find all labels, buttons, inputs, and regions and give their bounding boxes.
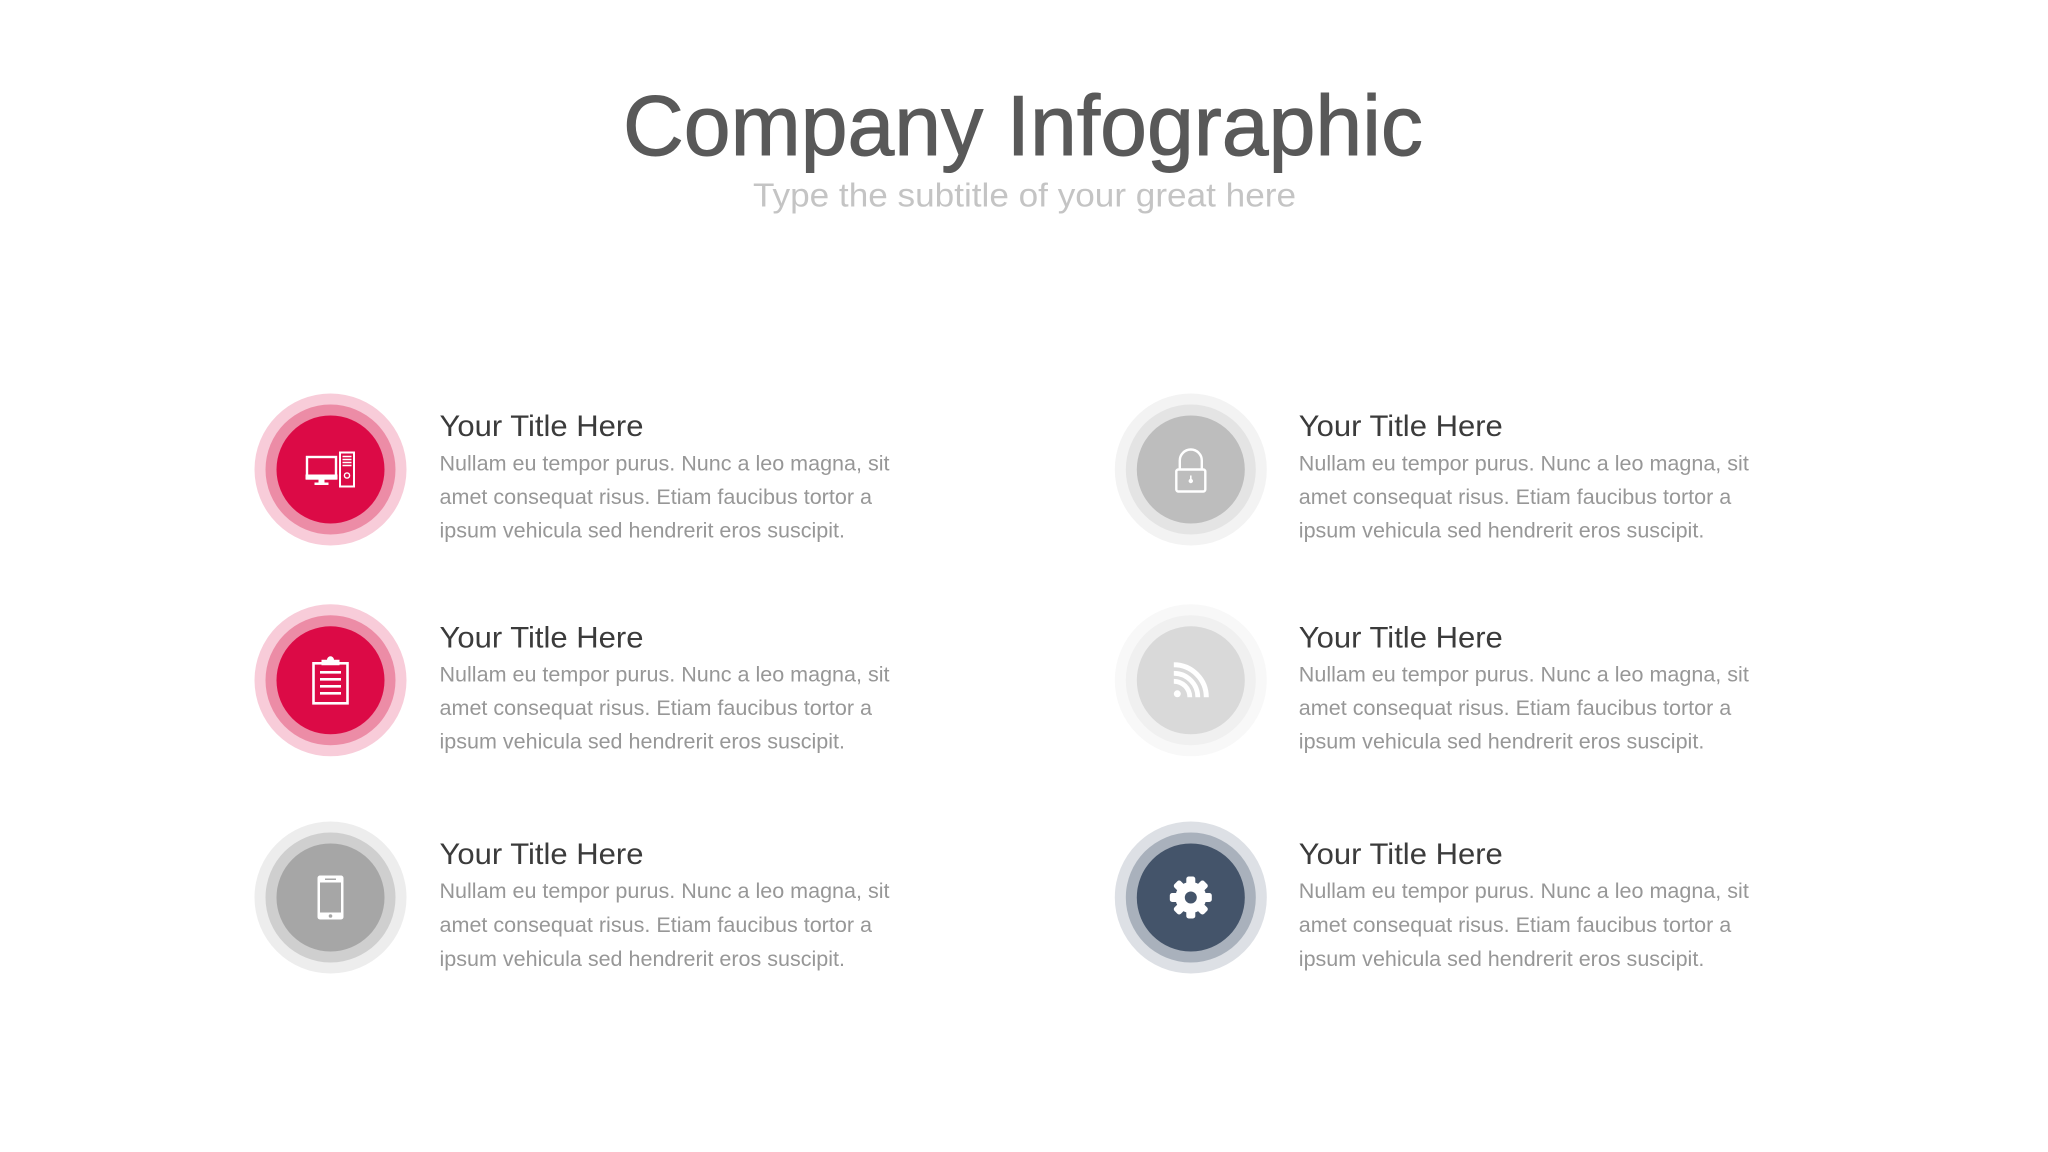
- icon: rss: [1115, 604, 1267, 756]
- item title: Your Title Here: [440, 410, 644, 443]
- icon: lock: [1115, 394, 1267, 546]
- item text: Nullam eu tempor purus. Nunc a leo magna, sit: [440, 662, 890, 686]
- item text: ipsum vehicula sed hendrerit eros suscipit.: [440, 730, 845, 754]
- item text: amet consequat risus. Etiam faucibus tortor a: [440, 696, 872, 720]
- item text: [440, 452, 890, 542]
- icon: computer: [254, 394, 406, 546]
- item text: ipsum vehicula sed hendrerit eros suscipit.: [440, 518, 845, 542]
- item title: Your Title Here: [1299, 410, 1503, 443]
- item text: Nullam eu tempor purus. Nunc a leo magna, sit: [1299, 452, 1749, 476]
- item: clipboard: [254, 604, 890, 756]
- item text: amet consequat risus. Etiam faucibus tortor a: [440, 485, 872, 509]
- icon: phone: [254, 822, 406, 974]
- item text: amet consequat risus. Etiam faucibus tortor a: [1299, 485, 1731, 509]
- item text: ipsum vehicula sed hendrerit eros suscipit.: [440, 947, 845, 971]
- icon: gear: [1115, 822, 1267, 974]
- item text: [1299, 879, 1749, 971]
- item text: Nullam eu tempor purus. Nunc a leo magna, sit: [1299, 662, 1749, 686]
- item text: Nullam eu tempor purus. Nunc a leo magna, sit: [440, 879, 890, 903]
- item: gear: [1115, 822, 1749, 974]
- item text: Nullam eu tempor purus. Nunc a leo magna, sit: [440, 452, 890, 476]
- item title: Your Title Here: [440, 838, 644, 871]
- title: Company Infographic: [623, 79, 1423, 174]
- item text: [1299, 662, 1749, 754]
- item text: ipsum vehicula sed hendrerit eros suscipit.: [1299, 518, 1704, 542]
- item title: Your Title Here: [1299, 838, 1503, 871]
- item title: Your Title Here: [1299, 622, 1503, 654]
- subtitle: Type the subtitle of your great here: [753, 176, 1296, 214]
- item title: Your Title Here: [440, 622, 644, 654]
- item text: Nullam eu tempor purus. Nunc a leo magna, sit: [1299, 879, 1749, 903]
- item text: ipsum vehicula sed hendrerit eros suscipit.: [1299, 730, 1704, 754]
- item text: amet consequat risus. Etiam faucibus tortor a: [1299, 913, 1731, 937]
- item: rss: [1115, 604, 1749, 756]
- item: phone: [254, 822, 890, 974]
- item text: [440, 879, 890, 971]
- item text: [1299, 452, 1749, 542]
- icon: clipboard: [254, 604, 406, 756]
- item: computer: [254, 394, 890, 546]
- item text: ipsum vehicula sed hendrerit eros suscipit.: [1299, 947, 1704, 971]
- item text: [440, 662, 890, 754]
- item text: amet consequat risus. Etiam faucibus tortor a: [440, 913, 872, 937]
- item: lock: [1115, 394, 1749, 546]
- item text: amet consequat risus. Etiam faucibus tortor a: [1299, 696, 1731, 720]
